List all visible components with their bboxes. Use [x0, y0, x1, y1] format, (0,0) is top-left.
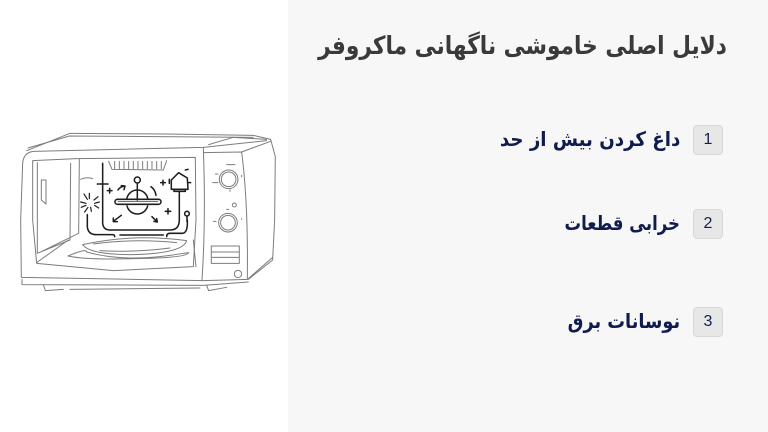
list item 1 text: داغ کردن بیش از حد: [500, 127, 680, 151]
number badge 3: 3: [704, 313, 712, 330]
microwave body: [21, 133, 275, 291]
list item 3 text: نوسانات برق: [567, 309, 680, 333]
number badge 1: 1: [704, 131, 712, 148]
title: دلایل اصلی خاموشی ناگهانی ماکروفر: [318, 31, 727, 60]
number badge 3: [693, 307, 723, 337]
panel: right background: [288, 0, 768, 432]
number badge 2: [693, 209, 723, 239]
number badge 1: [693, 125, 723, 155]
number badge 2: 2: [704, 215, 712, 232]
list item 2 text: خرابی قطعات: [565, 211, 680, 235]
icon: circuit diagram: [81, 163, 191, 237]
illustration: microwave sketch: [20, 132, 276, 292]
